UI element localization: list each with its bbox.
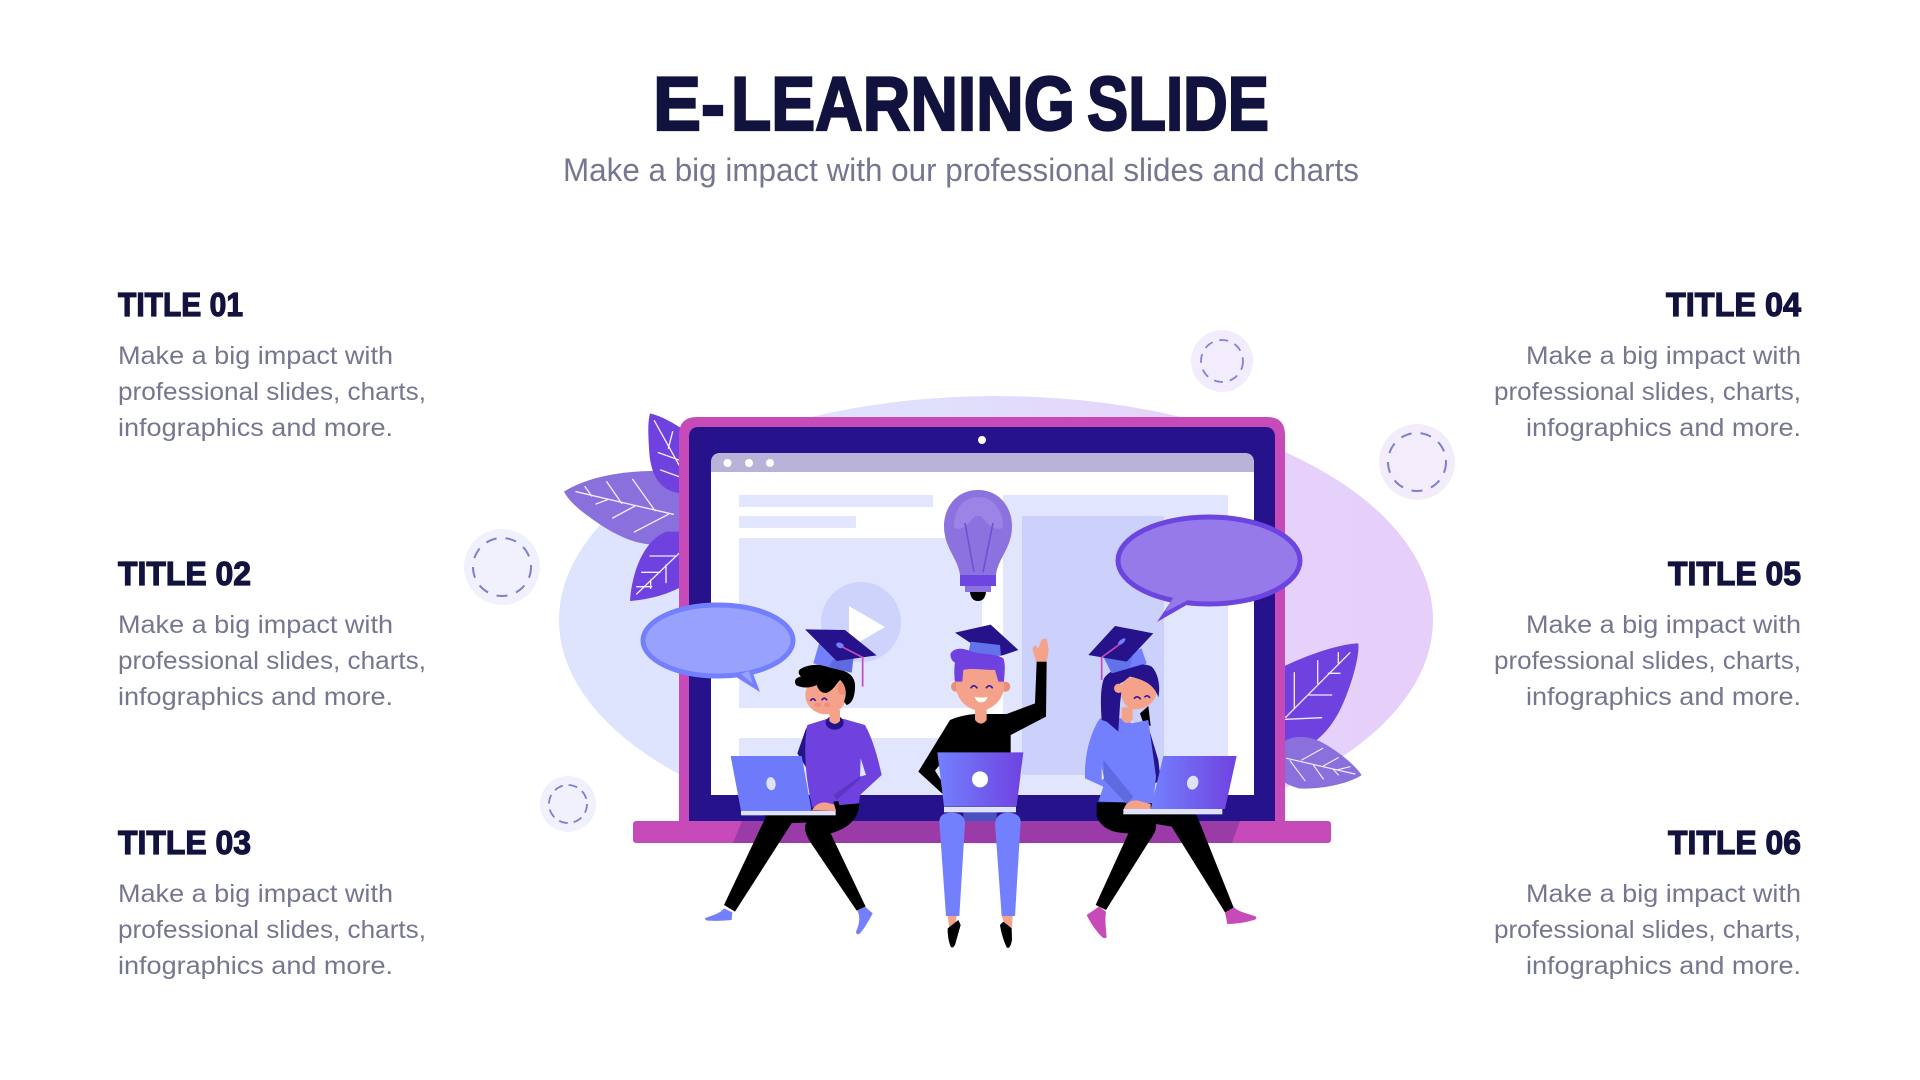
raised hand <box>1032 638 1049 662</box>
title: E- <box>653 62 725 147</box>
laptop monitor bezel <box>679 417 1285 821</box>
icon: dashed circle top right <box>1191 330 1253 392</box>
laptop <box>1151 756 1237 809</box>
cheeks <box>814 703 821 707</box>
icon: dashed circle lower left <box>540 776 596 832</box>
hair <box>951 649 1005 682</box>
text block: title 04 <box>1494 286 1802 442</box>
text block: title 04: infographics and more. <box>1526 414 1801 442</box>
ankles <box>948 916 1013 930</box>
text block: title 04: professional slides, charts, <box>1494 378 1801 406</box>
face <box>1121 675 1157 709</box>
sweater <box>805 719 882 807</box>
title: SLIDE <box>1087 62 1269 147</box>
neck <box>829 710 840 724</box>
text block: title 03 <box>118 824 426 980</box>
hair <box>1101 664 1159 732</box>
icon: play button <box>821 582 901 662</box>
text block: title 06: professional slides, charts, <box>1494 916 1801 944</box>
hand <box>1124 800 1151 809</box>
text block: title 01: infographics and more. <box>118 414 393 442</box>
text block: title 05: professional slides, charts, <box>1494 647 1801 675</box>
title <box>653 62 1269 147</box>
text block: title 02: professional slides, charts, <box>118 647 426 675</box>
person 3 with laptop <box>1085 626 1256 938</box>
text block: title 04: TITLE 04 <box>1666 286 1802 323</box>
far arm <box>797 727 807 768</box>
sweater <box>1085 718 1156 803</box>
mouth <box>975 697 988 702</box>
ears <box>951 682 961 692</box>
legs <box>724 815 793 912</box>
text block: title 02 <box>118 555 426 711</box>
text block: title 02: infographics and more. <box>118 683 393 711</box>
cap <box>813 643 854 673</box>
text block: title 02: Make a big impact with <box>118 611 393 639</box>
collar <box>826 716 844 730</box>
legs <box>1096 802 1234 912</box>
text block: title 05: infographics and more. <box>1526 683 1801 711</box>
text block: title 01: professional slides, charts, <box>118 378 426 406</box>
laptop <box>937 752 1023 806</box>
back hair <box>1140 706 1151 726</box>
cap <box>1103 650 1147 673</box>
torso and arms <box>950 662 1047 760</box>
text block: title 01: TITLE 01 <box>118 286 243 323</box>
text block: title 06: infographics and more. <box>1526 952 1801 980</box>
legs <box>939 813 965 916</box>
text block: title 05: Make a big impact with <box>1526 611 1801 639</box>
head <box>805 676 847 714</box>
eyes <box>971 686 993 688</box>
shoes <box>705 908 732 921</box>
text block: title 05: TITLE 05 <box>1668 555 1801 592</box>
eyes <box>810 698 827 701</box>
shoes <box>948 920 961 947</box>
camera dot <box>978 436 986 444</box>
speech bubble right <box>1118 517 1300 622</box>
cap <box>955 625 1018 656</box>
text block: title 03: Make a big impact with <box>118 880 393 908</box>
neck <box>975 705 987 724</box>
braid <box>1146 723 1161 783</box>
eyes <box>1134 696 1150 699</box>
browser window <box>711 453 1254 795</box>
leaves left <box>564 413 682 601</box>
text block: title 03: TITLE 03 <box>118 824 251 861</box>
text block: title 01 <box>118 286 426 442</box>
neck <box>1122 707 1133 723</box>
speech bubble left <box>643 605 793 692</box>
laptop base <box>633 821 1331 843</box>
text block: title 06 <box>1494 824 1801 980</box>
ear <box>1114 684 1123 693</box>
text block: title 06: TITLE 06 <box>1668 824 1801 861</box>
hand <box>812 802 836 811</box>
icon: dashed circle right <box>1379 424 1455 500</box>
person 2 with laptop <box>918 625 1049 948</box>
pants seat <box>963 812 997 821</box>
subtitle: Make a big impact with our professional slides and charts <box>563 152 1359 188</box>
hair <box>795 665 855 705</box>
ear <box>838 682 847 695</box>
text block: title 06: Make a big impact with <box>1526 880 1801 908</box>
person 1 with laptop <box>705 629 882 934</box>
background blob <box>559 396 1433 844</box>
laptop <box>731 756 812 811</box>
title: LEARNING <box>731 62 1075 147</box>
text block: title 05 <box>1494 555 1801 711</box>
head <box>956 667 1004 711</box>
icon: dashed circle left <box>464 529 540 605</box>
text block: title 01: Make a big impact with <box>118 342 393 370</box>
leaves right <box>1283 643 1362 789</box>
text block: title 04: Make a big impact with <box>1526 342 1801 370</box>
icon: light bulb <box>944 490 1012 601</box>
shoes <box>1087 907 1107 938</box>
text block: title 03: professional slides, charts, <box>118 916 426 944</box>
text block: title 02: TITLE 02 <box>118 555 251 592</box>
text block: title 03: infographics and more. <box>118 952 393 980</box>
